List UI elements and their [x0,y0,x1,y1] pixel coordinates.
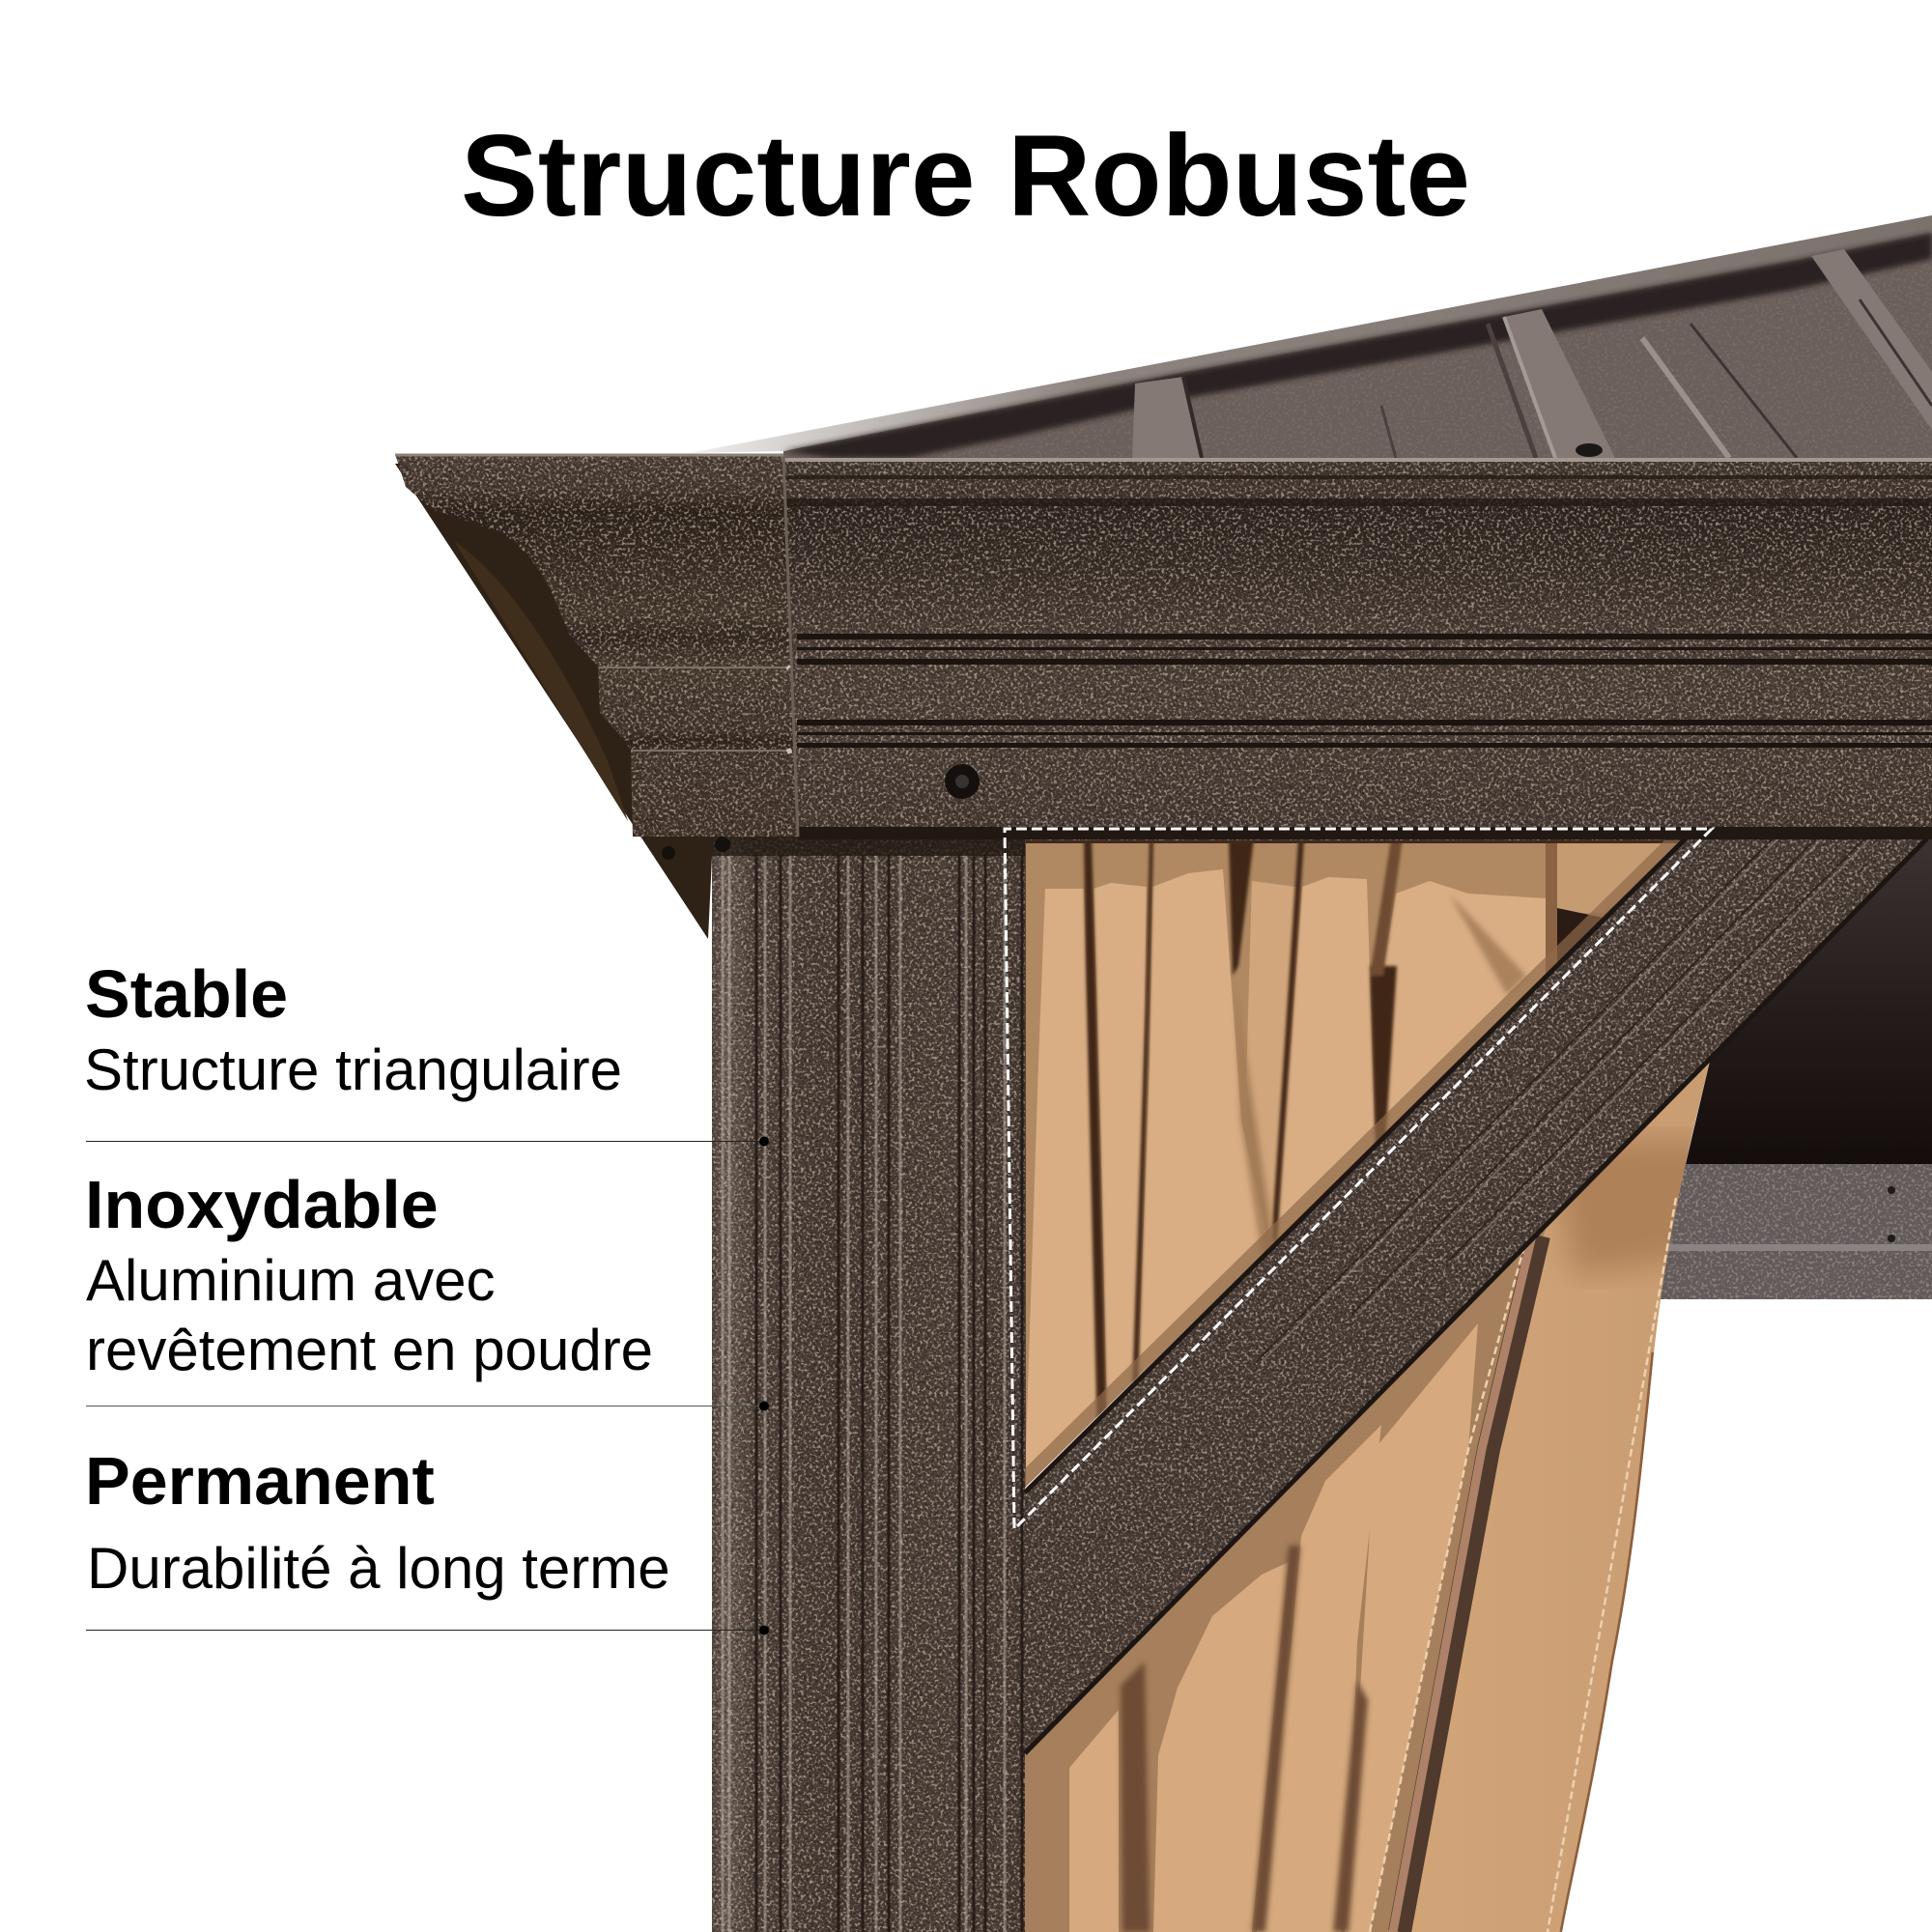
feature: Stable [84,956,769,1146]
diagonal brace [1025,838,1927,1753]
white dashed triangle highlight [1005,829,1712,1528]
feature: Permanent [85,1443,769,1634]
description: Durabilité à long terme [87,1536,670,1601]
zipper [1393,1236,1539,1932]
heading: Inoxydable [85,1167,439,1242]
post grooves [712,837,1025,1932]
aluminium post [712,837,1025,1932]
curtain: upper panel [1005,831,1700,1507]
curtain: lower panel with zipper [1025,1043,1720,1932]
leader line [86,1625,769,1634]
gazebo photo [386,215,1932,1932]
feature: Inoxydable [85,1167,769,1410]
leader line [86,1401,769,1410]
brace edges [1025,838,1927,1753]
main beam [783,458,1932,840]
metal speckle texture [386,444,1932,1932]
description: revêtement en poudre [86,1318,653,1382]
cap screws [662,837,730,860]
leader line [86,1136,769,1146]
cap edges [395,454,798,837]
corner cap underside [395,454,798,939]
description [86,1248,653,1382]
heading: Stable [85,956,288,1032]
rear interior and lower beam [1642,838,1932,1299]
corner cap front [395,454,798,837]
heading: Permanent [85,1443,435,1519]
screw [945,764,980,799]
metal details [395,454,1932,1932]
description: Aluminium avec [86,1248,495,1313]
description: Structure triangulaire [84,1037,622,1102]
beam mouldings [784,458,1932,839]
roof [690,215,1932,459]
title: Structure Robuste [461,112,1470,241]
